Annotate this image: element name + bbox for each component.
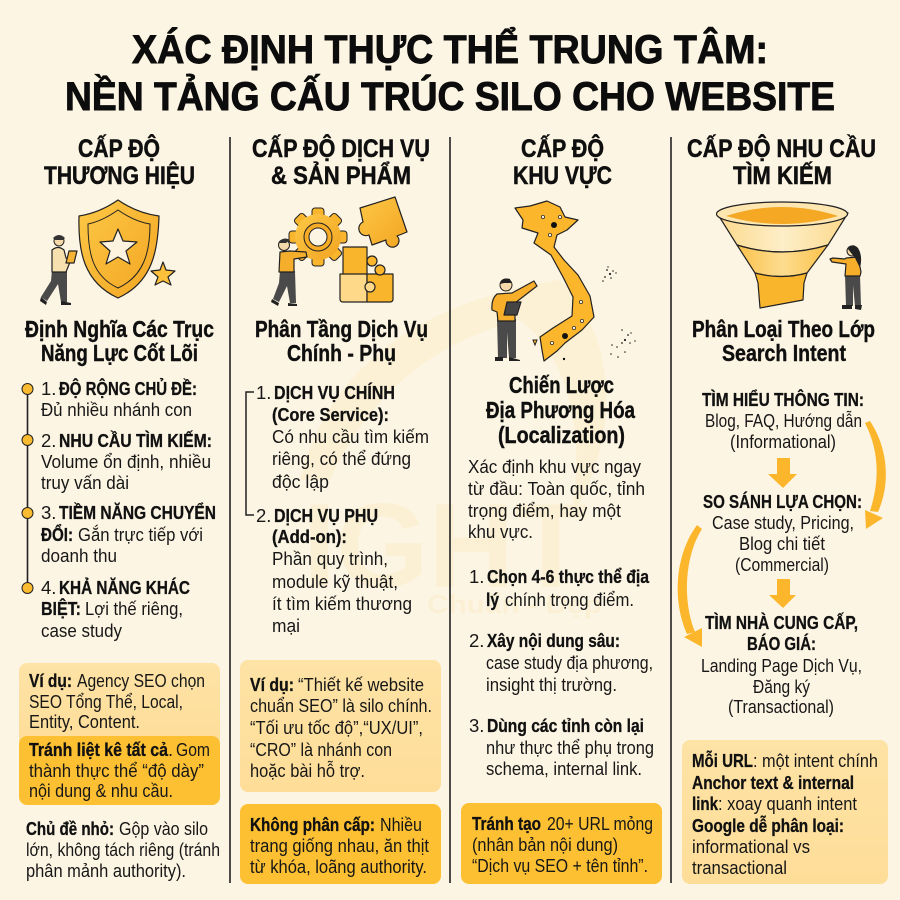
text block: region intro: từ đầu: Toàn quốc, tỉnh	[468, 478, 645, 499]
icon: gear, puzzle and person	[271, 197, 407, 306]
panel: brand level	[19, 133, 220, 881]
callout: warning: nội dung & nhu cầu.	[29, 780, 173, 801]
panel: service level	[240, 133, 441, 884]
subheading: search intent level	[692, 316, 875, 366]
text block: region intro: khu vực.	[468, 521, 533, 542]
timeline list: ĐỘ RỘNG CHỦ ĐỀ:	[59, 378, 197, 399]
callout: warning: Tránh liệt kê tất cả	[29, 739, 169, 760]
numbered list: lý	[486, 589, 500, 610]
watermark logo	[300, 280, 606, 619]
subheading: service level	[255, 316, 428, 366]
text block: commercial: Case study, Pricing,	[712, 512, 854, 533]
bracket list: riêng, có thể đứng	[272, 448, 411, 469]
bracket list	[246, 382, 429, 636]
arrow: curved left	[678, 525, 702, 647]
callout: warning	[19, 736, 220, 805]
subheading: region level	[486, 372, 635, 448]
heading: search intent level: TÌM KIẾM	[733, 161, 832, 190]
text block: transactional: Đăng ký	[753, 676, 811, 697]
heading: search intent level: CẤP ĐỘ NHU CẦU	[687, 133, 876, 163]
callout: warning: 20+ URL mỏng	[547, 813, 653, 834]
bracket list: (Add-on):	[272, 526, 347, 547]
callout: takeaways: informational vs	[692, 836, 810, 857]
icon: funnel and person	[716, 202, 862, 310]
text block: informational: Blog, FAQ, Hướng dẫn	[705, 410, 862, 431]
timeline list: TIỀM NĂNG CHUYỂN	[59, 502, 216, 523]
bracket list: Phần quy trình,	[272, 548, 388, 569]
timeline list	[22, 378, 216, 641]
timeline list: 3.	[41, 502, 56, 523]
numbered list: schema, internal link.	[486, 758, 642, 779]
bracket list: Có nhu cầu tìm kiếm	[272, 426, 429, 447]
callout: example: Agency SEO chọn	[77, 670, 205, 691]
callout: takeaways: transactional	[692, 857, 787, 878]
callout: warning	[461, 803, 662, 884]
arrow: down 1	[768, 458, 797, 488]
text block: transactional: (Transactional)	[728, 696, 834, 717]
icon: shield with star and person	[40, 200, 175, 305]
text block: region intro	[468, 456, 645, 542]
text block: commercial: Blog chi tiết	[739, 533, 825, 554]
numbered list: 3.	[469, 715, 484, 736]
subheading: region level: Địa Phương Hóa	[486, 397, 635, 423]
timeline list: case study	[41, 620, 123, 641]
callout: warning: “Dịch vụ SEO + tên tỉnh”.	[472, 855, 648, 876]
heading: service level	[252, 133, 430, 190]
timeline list: truy vấn dài	[41, 472, 129, 493]
timeline list: doanh thu	[41, 545, 117, 566]
text block: informational	[702, 389, 864, 452]
callout: example: Ví dụ:	[29, 670, 72, 691]
numbered list: Xây nội dung sâu:	[487, 630, 620, 651]
note: small topics: phân mảnh authority).	[26, 860, 186, 881]
bracket list: 1.	[256, 382, 271, 403]
heading: brand level: CẤP ĐỘ	[78, 133, 160, 163]
subheading: service level: Phân Tầng Dịch Vụ	[255, 316, 428, 342]
numbered list	[469, 566, 654, 779]
callout: example: Entity, Content.	[29, 711, 140, 732]
callout: example: hoặc bài hỗ trợ.	[250, 760, 365, 781]
heading: region level: KHU VỰC	[513, 162, 612, 190]
callout: warning: (nhân bản nội dung)	[472, 834, 618, 855]
subheading: region level: (Localization)	[498, 422, 625, 448]
subheading: brand level	[25, 316, 214, 366]
numbered list: Dùng các tỉnh còn lại	[487, 715, 644, 736]
timeline list: Đủ nhiều nhánh con	[41, 399, 192, 420]
heading: service level: CẤP ĐỘ DỊCH VỤ	[252, 133, 430, 163]
callout: example	[240, 660, 441, 792]
text block: region intro: Xác định khu vực ngay	[468, 456, 642, 477]
bracket list: ít tìm kiếm thương	[272, 593, 412, 614]
numbered list: 2.	[469, 630, 484, 651]
bracket list: DỊCH VỤ PHỤ	[274, 505, 378, 526]
bracket list: module kỹ thuật,	[272, 571, 398, 592]
callout: warning: Không phân cấp:	[250, 814, 375, 835]
text block: informational: TÌM HIỂU THÔNG TIN:	[702, 389, 864, 410]
heading: brand level: THƯƠNG HIỆU	[44, 160, 195, 190]
callout: example: “Tối ưu tốc độ”,“UX/UI”,	[250, 717, 423, 738]
callout: takeaways: Mỗi URL	[692, 750, 753, 771]
callout: example: SEO Tổng Thể, Local,	[29, 691, 183, 712]
text block: commercial: (Commercial)	[735, 554, 829, 575]
timeline list: 1.	[41, 378, 56, 399]
arrow: curved right	[865, 421, 886, 529]
callout: warning: .	[168, 739, 173, 760]
subheading: region level: Chiến Lược	[509, 372, 614, 398]
numbered list: chính trọng điểm.	[505, 589, 634, 610]
callout: example	[19, 663, 220, 748]
numbered list: như thực thể phụ trong	[486, 737, 654, 758]
callout: takeaways: : một intent chính	[753, 750, 878, 771]
callout: takeaways: Anchor text & internal	[692, 772, 854, 793]
timeline list: ĐỔI:	[41, 524, 73, 545]
panel: region level	[461, 133, 662, 884]
panel: search intent level	[678, 133, 888, 884]
callout: takeaways: link	[692, 793, 719, 814]
icon: Vietnam map and person	[492, 201, 636, 361]
callout: example: Ví dụ:	[250, 674, 294, 695]
callout: takeaways	[682, 740, 888, 884]
timeline list: 4.	[41, 577, 56, 598]
callout: warning: trang giống nhau, ăn thịt	[250, 835, 429, 856]
numbered list: Chọn 4-6 thực thể địa	[487, 566, 650, 587]
note: small topics	[26, 818, 220, 881]
text block: informational: (Informational)	[730, 431, 836, 452]
heading: search intent level	[687, 133, 876, 190]
callout: warning: Nhiều	[380, 814, 422, 835]
text block: transactional: BÁO GIÁ:	[747, 633, 816, 654]
title: NỀN TẢNG CẤU TRÚC SILO CHO WEBSITE	[65, 73, 835, 119]
callout: warning: Gom	[176, 739, 210, 760]
text block: transactional: TÌM NHÀ CUNG CẤP,	[705, 612, 858, 633]
timeline list: Lợi thế riêng,	[85, 598, 183, 619]
note: small topics: Chủ đề nhỏ:	[26, 818, 114, 839]
callout: warning: từ khóa, loãng authority.	[250, 856, 427, 877]
text block: region intro: trọng điểm, hay một	[468, 500, 621, 521]
subheading: brand level: Năng Lực Cốt Lõi	[41, 340, 198, 366]
heading: service level: & SẢN PHẨM	[271, 160, 411, 190]
timeline list: Gắn trực tiếp với	[78, 524, 203, 545]
timeline list: NHU CẦU TÌM KIẾM:	[59, 430, 212, 451]
bracket list: mại	[272, 615, 300, 636]
note: small topics: Gộp vào silo	[119, 818, 208, 839]
timeline list: BIỆT:	[41, 598, 81, 619]
arrow: down 2	[769, 579, 796, 608]
bracket list: độc lập	[272, 471, 329, 492]
text block: transactional: Landing Page Dịch Vụ,	[701, 655, 862, 676]
note: small topics: lớn, không tách riêng (tránh	[26, 839, 220, 860]
timeline list: Volume ổn định, nhiều	[41, 451, 211, 472]
callout: warning: Tránh tạo	[472, 813, 541, 834]
callout: takeaways: Google dễ phân loại:	[692, 815, 844, 836]
watermark logo: IGHT	[303, 479, 587, 613]
subheading: service level: Chính - Phụ	[287, 340, 396, 366]
bracket list: 2.	[256, 505, 271, 526]
subheading: brand level: Định Nghĩa Các Trục	[25, 316, 214, 342]
timeline list: 2.	[41, 430, 56, 451]
callout: warning	[240, 804, 441, 884]
title	[65, 25, 835, 119]
callout: example: chuẩn SEO” là silo chính.	[250, 695, 432, 716]
callout: takeaways: : xoay quanh intent	[718, 793, 857, 814]
callout: example: “CRO” là nhánh con	[250, 739, 392, 760]
callout: warning: thành thực thể “độ dày”	[29, 760, 204, 781]
title: XÁC ĐỊNH THỰC THỂ TRUNG TÂM:	[132, 25, 768, 72]
heading: brand level	[44, 133, 195, 190]
text block: transactional	[701, 612, 862, 717]
numbered list: 1.	[469, 566, 484, 587]
heading: region level	[513, 133, 612, 190]
text block: commercial: SO SÁNH LỰA CHỌN:	[703, 491, 862, 512]
watermark logo: Chuẩn - Đẹp	[427, 589, 602, 619]
heading: region level: CẤP ĐỘ	[521, 133, 604, 163]
numbered list: insight thị trường.	[486, 674, 617, 695]
text block: commercial	[703, 491, 862, 575]
numbered list: case study địa phương,	[486, 652, 653, 673]
bracket list: (Core Service):	[272, 404, 389, 425]
timeline list: KHẢ NĂNG KHÁC	[59, 577, 190, 598]
subheading: search intent level: Search Intent	[722, 340, 846, 366]
bracket list: DỊCH VỤ CHÍNH	[274, 382, 395, 403]
callout: example: “Thiết kế website	[298, 674, 424, 695]
